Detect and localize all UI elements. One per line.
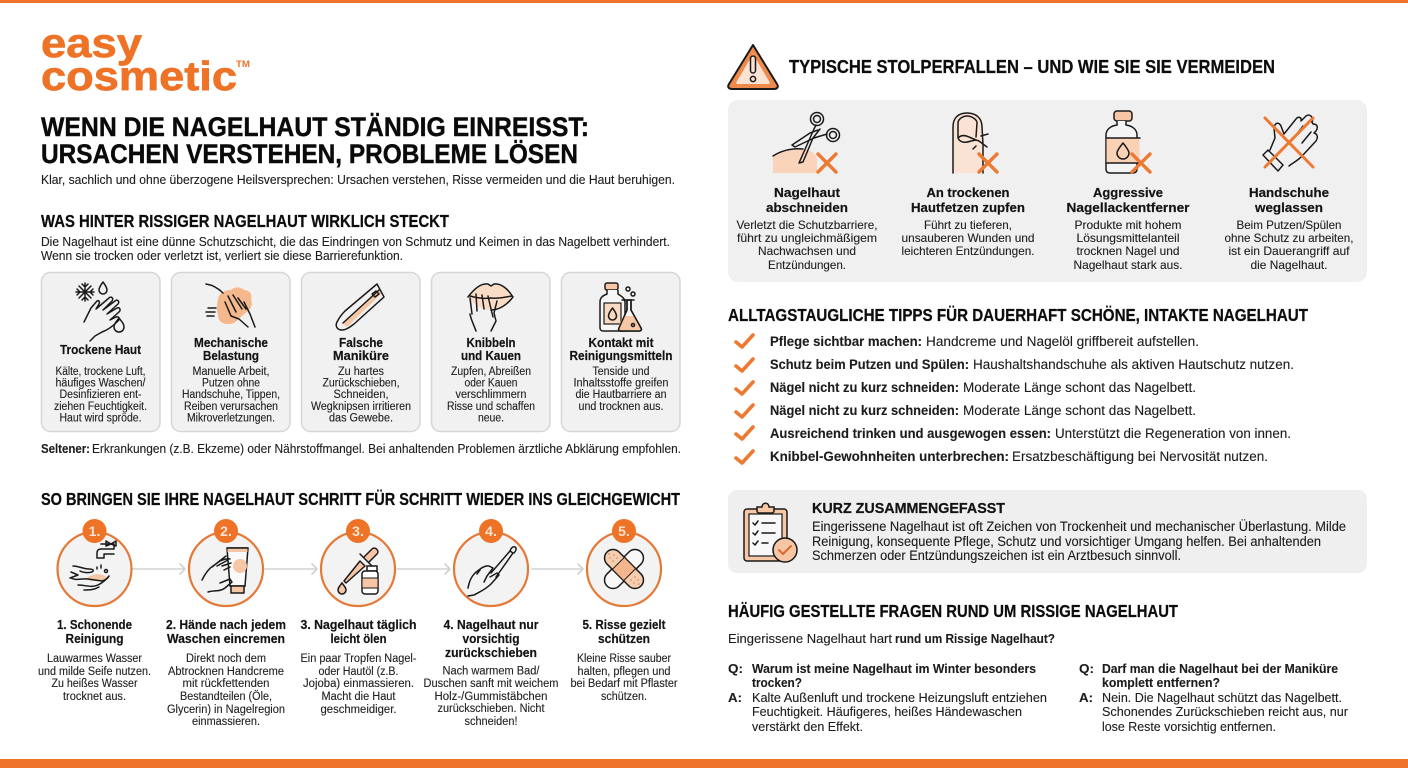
panel: Kontakt mit Reinigungsmitteln [562,272,680,432]
step 5 text: Kleine Risse sauber [577,653,671,665]
pitfall title: Handschuhe [1249,185,1329,200]
bottom orange bar [0,759,1408,768]
step 1: Schonende Reinigung [58,519,132,606]
pitfall title: Nagelhaut [774,185,841,200]
tip 5 [736,426,1291,441]
card body: Putzen ohne [202,378,260,390]
card body: die Hautbarriere an [576,389,666,401]
answer 1 [728,690,1047,734]
heading: pitfalls: TYPISCHE STOLPERFALLEN – UND WIE SIE SIE VERMEIDEN [789,57,1275,77]
question 2 [1079,661,1338,690]
step 1 text: und milde Seife nutzen. [38,666,151,678]
question 2: Q: [1079,661,1094,676]
arrow: step 2 to 3 [265,564,317,574]
step 3 text: Jojoba) einmassieren. [303,678,414,690]
card body [447,366,535,424]
summary text [812,519,1346,563]
FAQ item 2 [1079,661,1349,734]
step 2 text: mit rückfettenden [182,678,270,690]
step 4 text: Nach warmem Bad/ [442,666,540,678]
card body: ziehen Feuchtigkeit. [54,401,147,413]
card title: Knibbeln [466,336,516,350]
card body: und trocknen aus. [578,401,664,413]
step 1 heading: Reinigung [66,631,124,646]
step 5: Risse schützen [587,519,661,606]
tip 1 [736,334,1199,349]
card body: Mikroverletzungen. [187,412,275,424]
answer 2: Schonendes Zurückschieben reicht aus, nur [1102,704,1349,719]
pitfall: Hautfetzen zupfen [902,113,1034,258]
pitfall title [911,185,1025,215]
panel: summary [728,490,1367,573]
card title: Kontakt mit [588,336,654,350]
step 3 text: Ein paar Tropfen Nagel- [300,653,417,665]
pitfall text: Verletzt die Schutzbarriere, [736,218,878,232]
card body: Schneiden, [334,389,388,401]
icon: remover bottle [1106,111,1150,173]
step 2 text [167,653,285,728]
step 5 text: bei Bedarf mit Pflaster [570,678,678,690]
pitfall text: die Nagelhaut. [1250,258,1328,272]
pitfall: Handschuhe weglassen [1224,115,1354,272]
tip 4 [736,403,1196,418]
intro text: causes [41,235,670,263]
step 3: Nagelhaut ölen [321,519,395,606]
pitfall title [766,185,848,215]
card title: Mechanische [194,336,268,350]
card body: Haut wird spröde. [60,412,142,424]
tip 5: Ausreichend trinken und ausgewogen essen: [770,426,1051,441]
step 2 text: Direkt noch dem [186,653,266,665]
icon: dropper and oil bottle [338,548,378,594]
icon: nail clipper [336,284,384,330]
intro text: causes: Wenn sie trocken oder verletzt ist, verliert sie diese Barrierefunktion. [41,249,403,263]
card body: das Gewebe. [329,412,393,424]
pitfall text: führt zu ungleichmäßigem [737,231,877,245]
icon: tap and washing hands [70,541,116,590]
step 3 text: oder Hautöl (z.B. [318,666,398,678]
question 2: komplett entfernen? [1102,675,1220,690]
pitfall text: ohne Schutz zu arbeiten, [1224,231,1354,245]
summary text: Schmerzen oder Entzündungszeichen ist ein Arztbesuch sinnvoll. [812,548,1181,563]
step 4 text: zurückschieben. Nicht [438,703,545,715]
icon: hand cream tube [202,548,248,593]
tip 6: Ersatzbeschäftigung bei Nervosität nutzen. [1012,449,1268,464]
step 4: Zurückschieben [454,519,528,606]
step 5 heading [582,617,666,646]
card body: häufiges Waschen/ [56,378,146,390]
pitfall title: An trockenen [926,185,1010,200]
card body: neue. [478,412,504,424]
heading: steps: SO BRINGEN SIE IHRE NAGELHAUT SCHRITT FÜR SCHRITT WIEDER INS GLEICHGEWICHT [41,489,680,509]
panel: Knibbeln und Kauen [432,272,550,432]
card body: Zu hartes [338,366,384,378]
answer 2 [1079,690,1349,734]
subtitle: Klar, sachlich und ohne überzogene Heilsversprechen: Ursachen verstehen, Risse vermeiden und die Haut beruhigen. [41,173,675,187]
pitfall text: Lösungsmittelanteil [1076,231,1180,245]
card body: Kälte, trockene Luft, [56,366,146,378]
card body: Wegknipsen irritieren [311,401,411,413]
card title [461,336,521,363]
question 1: trocken? [752,675,802,690]
step 3: Nagelhaut ölen: 3. [352,523,364,539]
question 1: Q: [728,661,743,676]
summary text: Eingerissene Nagelhaut ist oft Zeichen von Trockenheit und mechanischer Überlastung. Milde [812,519,1346,534]
card title [570,336,672,363]
icon: crossed plasters [601,546,647,592]
card title: Reinigungsmitteln [570,349,672,363]
pitfall text: trocknen Nagel und [1076,244,1180,258]
tip 1: Pflege sichtbar machen: [770,334,922,349]
panel: Mechanische Belastung [172,272,290,432]
tip 3: Nägel nicht zu kurz schneiden: [770,380,959,395]
card body: verschlimmern [456,389,526,401]
step 4 text: schneiden! [464,716,518,728]
pitfall text: Führt zu tieferen, [924,218,1012,232]
arrow: step 1 to 2 [133,564,185,574]
FAQ intro: Eingerissene Nagelhaut hart [728,631,892,646]
icon: cleaner bottle and flask [600,283,641,331]
step 1: Schonende Reinigung: 1. [89,523,100,539]
step 1 text: trocknet aus. [63,691,126,703]
icon: clipboard with check [744,503,797,562]
pitfall title: abschneiden [766,200,848,215]
panel: Falsche Maniküre [302,272,420,432]
note: rarer causes: Seltener: [41,442,90,456]
title [41,112,589,169]
card body: Zupfen, Abreißen [451,366,531,378]
tip 3 [736,380,1196,395]
pitfall text [736,218,878,272]
step 1 heading: 1. Schonende [57,617,132,632]
step 4 text: Holz-/Gummistäbchen [434,691,548,703]
panel: pitfalls [728,100,1367,282]
step 1 text [38,653,151,703]
answer 1: Kalte Außenluft und trockene Heizungsluft entziehen [752,690,1047,705]
icon: hand with cuticle stick [468,547,516,596]
icon: warning triangle [728,45,778,89]
FAQ intro: rund um Rissige Nagelhaut? [895,631,1055,646]
card title [194,336,268,363]
tip 5: Unterstützt die Regeneration von innen. [1055,426,1291,441]
summary text: Reinigung, konsequente Pflege, Schutz und vorsichtiger Umgang helfen. Bei anhaltenden [812,534,1321,549]
step 3 text: Macht die Haut [322,691,396,703]
card body [54,366,147,424]
pitfall: Nagellackentferner [1066,111,1190,272]
step 1 heading [57,617,132,646]
step 3 heading [300,617,417,646]
step 2 text: einmassieren. [192,716,260,728]
step 1 text: Lauwarmes Wasser [47,653,142,665]
icon: lips and fingers [468,284,513,331]
FAQ intro [728,631,1055,646]
FAQ item 1 [728,661,1047,734]
tip 2: Schutz beim Putzen und Spülen: [770,357,969,372]
tip 2: Haushaltshandschuhe als aktiven Hautschutz nutzen. [973,357,1294,372]
step 3 heading: leicht ölen [330,631,387,646]
pitfall text: unsauberen Wunden und [902,231,1034,245]
step 2 text: Bestandteilen (Öle, [180,691,272,703]
tip 3: Moderate Länge schont das Nagelbett. [963,380,1196,395]
pitfall text [1224,218,1354,272]
step 2 text: Abtrocknen Handcreme [168,666,284,678]
answer 2: A: [1079,690,1093,705]
card title: und Kauen [461,349,521,363]
logo: easycosmetic: cosmetic [41,53,237,99]
card body: Tenside und [592,366,650,378]
icon: finger with torn skin [953,113,997,173]
card body: oder Kauen [464,378,518,390]
panel: Trockene Haut [42,272,160,432]
step 5 text: halten, pflegen und [578,666,670,678]
answer 1: Feuchtigkeit. Häufigeres, heißes Händewaschen [752,704,1022,719]
pitfall text [1074,218,1182,272]
step 5 text [570,653,678,703]
step 4 text [424,666,558,728]
card body [182,366,280,424]
logo: easycosmetic: easy [41,20,142,66]
pitfall text: ist ein Dauerangriff auf [1228,244,1350,258]
step 1 text: Zu heißes Wasser [52,678,138,690]
card body: Manuelle Arbeit, [192,366,270,378]
answer 1: verstärkt den Effekt. [752,719,863,734]
question 1 [728,661,1036,690]
tips list [736,334,1294,464]
title: URSACHEN VERSTEHEN, PROBLEME LÖSEN [41,139,578,169]
card title: Trockene Haut [60,343,142,357]
icon: dry hand with snowflake and drops [76,282,124,341]
icon: crossed-out glove [1263,115,1317,171]
step 5 heading: schützen [598,631,650,646]
pitfall title: Aggressive [1093,185,1163,200]
step 5 heading: 5. Risse gezielt [582,617,666,632]
tip 1: Handcreme und Nagelöl griffbereit aufstellen. [926,334,1199,349]
pitfall text: Beim Putzen/Spülen [1236,218,1342,232]
pitfall title: Nagellackentferner [1066,200,1190,215]
card body: Desinfizieren ent- [60,389,142,401]
intro text: causes: Die Nagelhaut ist eine dünne Schutzschicht, die das Eindringen von Schmutz und Keimen in das Nagelbett verhindert. [41,235,670,249]
card body: Inhaltsstoffe greifen [574,378,668,390]
card title [333,336,389,363]
card body [311,366,411,424]
icon: scissors on skin [773,112,840,173]
step 3 text [300,653,417,716]
step 4 heading: vorsichtig [462,631,520,646]
tip 6 [736,449,1268,464]
icon: hand rubbing with cloth [206,284,255,327]
pitfall text: Nagelhaut stark aus. [1074,258,1182,272]
step 2 heading: Waschen eincremen [167,631,285,646]
pitfall title [1066,185,1190,215]
question 2: Darf man die Nagelhaut bei der Maniküre [1102,661,1338,676]
step 4: Zurückschieben: 4. [485,523,497,539]
answer 2: lose Reste vorsichtig entfernen. [1102,719,1276,734]
heading: causes: WAS HINTER RISSIGER NAGELHAUT WIRKLICH STECKT [41,211,449,231]
arrow: step 3 to 4 [397,564,450,574]
step 2 heading: 2. Hände nach jedem [166,617,286,632]
heading: FAQ: HÄUFIG GESTELLTE FRAGEN RUND UM RISSIGE NAGELHAUT [728,601,1178,621]
logo: easycosmetic: TM [236,59,250,70]
card body: Risse und schaffen [447,401,535,413]
card body: Zurückschieben, [322,378,400,390]
step 4 text: Duschen sanft mit weichem [424,678,558,690]
question 1: Warum ist meine Nagelhaut im Winter besonders [752,661,1036,676]
tip 2 [736,357,1294,372]
pitfall text: Entzündungen. [768,258,846,272]
step 3 text: geschmeidiger. [320,704,396,716]
pitfall text [902,218,1034,258]
answer 1: A: [728,690,742,705]
tip 4: Moderate Länge schont das Nagelbett. [963,403,1196,418]
top orange bar [0,0,1408,3]
pitfall text: Nachwachsen und [758,244,856,258]
step 2 text: Glycerin) in Nagelregion [167,704,285,716]
answer 2: Nein. Die Nagelhaut schützt das Nagelbett. [1102,690,1342,705]
step 4 heading [444,617,538,660]
step 5: Risse schützen: 5. [618,523,630,539]
card body: Reiben verursachen [184,401,278,413]
step 2: Hände eincremen [189,519,263,606]
pitfall title: Hautfetzen zupfen [911,200,1025,215]
step 4 heading: zurückschieben [445,645,537,660]
heading: everyday tips: ALLTAGSTAUGLICHE TIPPS FÜR DAUERHAFT SCHÖNE, INTAKTE NAGELHAUT [728,305,1308,325]
card title: Belastung [203,349,259,363]
card body: Handschuhe, Tippen, [182,389,280,401]
step 2 heading [166,617,286,646]
pitfall title [1249,185,1329,215]
step 2: Hände eincremen: 2. [220,523,232,539]
note: rarer causes: Erkrankungen (z.B. Ekzeme) oder Nährstoffmangel. Bei anhaltenden Problemen ärztliche Abklärung empfohlen. [92,442,681,456]
pitfall text: leichteren Entzündungen. [902,244,1034,258]
summary heading: KURZ ZUSAMMENGEFASST [812,500,1005,517]
title: WENN DIE NAGELHAUT STÄNDIG EINREISST: [41,112,589,142]
tip 4: Nägel nicht zu kurz schneiden: [770,403,959,418]
step 4 heading: 4. Nagelhaut nur [444,617,538,632]
pitfall text: Produkte mit hohem [1074,218,1182,232]
arrow: step 4 to 5 [532,564,583,574]
logo: easycosmetic [41,20,250,99]
step 5 text: schützen. [601,691,647,703]
pitfall title: weglassen [1254,200,1323,215]
card title: Falsche [339,336,383,350]
tip 6: Knibbel-Gewohnheiten unterbrechen: [770,449,1009,464]
card title: Maniküre [333,349,389,363]
pitfall: Nagelhaut abschneiden [736,112,878,272]
step 3 heading: 3. Nagelhaut täglich [300,617,417,632]
card body [574,366,668,413]
